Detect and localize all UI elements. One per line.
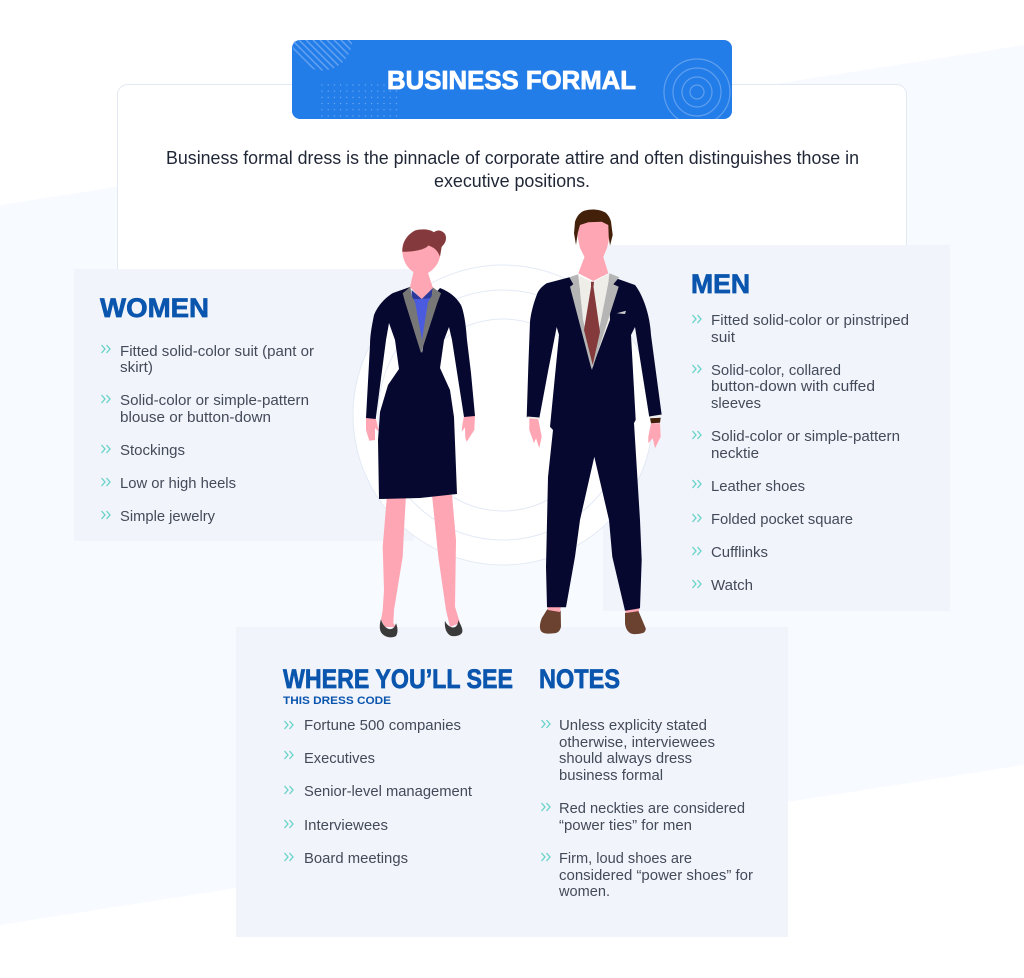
- banner rings: [664, 59, 730, 125]
- men items: Fitted solid-color or pinstriped: [711, 312, 909, 329]
- women items: Stockings: [120, 442, 185, 459]
- women heading: WOMEN: [100, 293, 209, 323]
- man tie: [584, 282, 600, 365]
- man head and neck: [577, 220, 610, 281]
- intro text: executive positions.: [434, 171, 590, 191]
- notes items: “power ties” for men: [559, 817, 692, 834]
- men items: Watch: [711, 577, 753, 594]
- notes items: business formal: [559, 767, 663, 784]
- man hair: [574, 209, 613, 246]
- where items: Fortune 500 companies: [304, 717, 461, 734]
- man watch: [650, 418, 661, 423]
- woman collar: [412, 288, 433, 299]
- where you'll see list: [283, 664, 513, 867]
- panel: intro card: [118, 84, 906, 384]
- woman blouse: [412, 297, 432, 342]
- women items: Low or high heels: [120, 475, 236, 492]
- where subheading: THIS DRESS CODE: [283, 695, 391, 707]
- notes items: Unless explicity stated: [559, 717, 707, 734]
- women items: skirt): [120, 359, 153, 376]
- women list: [100, 293, 314, 525]
- men items: suit: [711, 329, 736, 346]
- man cuffs: [527, 415, 662, 418]
- title: BUSINESS FORMAL: [387, 65, 636, 95]
- women items: Solid-color or simple-pattern: [120, 392, 309, 409]
- notes items: otherwise, interviewees: [559, 734, 715, 751]
- man shoes: [540, 609, 646, 634]
- men items: Folded pocket square: [711, 511, 853, 528]
- men items: sleeves: [711, 395, 761, 412]
- where items: Board meetings: [304, 850, 408, 867]
- woman head and neck: [402, 233, 441, 300]
- where items: Senior-level management: [304, 783, 473, 800]
- notes items: [542, 717, 753, 900]
- panel: women: [74, 269, 414, 541]
- man suit: [527, 277, 662, 611]
- where items: Interviewees: [304, 817, 388, 834]
- notes items: women.: [558, 883, 610, 900]
- men items: [692, 312, 909, 594]
- banner dots: [321, 84, 398, 119]
- intro text: [166, 148, 859, 191]
- women items: blouse or button-down: [120, 409, 271, 426]
- notes items: Firm, loud shoes are: [559, 850, 692, 867]
- title banner: [292, 40, 732, 119]
- banner stripes: [292, 40, 352, 70]
- men items: Leather shoes: [711, 478, 805, 495]
- women items: [102, 343, 314, 525]
- men items: necktie: [711, 445, 759, 462]
- men list: [691, 269, 909, 594]
- panel: men: [603, 245, 950, 611]
- man shirt: [579, 274, 610, 368]
- woman hair: [402, 229, 446, 257]
- men heading: MEN: [691, 269, 750, 299]
- woman jacket and skirt: [366, 287, 475, 499]
- notes heading: NOTES: [539, 664, 620, 694]
- figure: man: [527, 209, 662, 634]
- woman legs: [381, 495, 460, 627]
- men items: Solid-color, collared: [711, 362, 841, 379]
- panel: where and notes: [236, 627, 788, 937]
- where items: [284, 717, 473, 867]
- notes items: Red neckties are considered: [559, 800, 745, 817]
- notes items: should always dress: [559, 750, 692, 767]
- women items: Simple jewelry: [120, 508, 215, 525]
- man lapels: [569, 273, 619, 370]
- women items: Fitted solid-color suit (pant or: [120, 343, 314, 360]
- concentric rings behind figures: [353, 265, 653, 565]
- woman lapels: [403, 287, 441, 353]
- where heading: WHERE YOU’LL SEE: [283, 664, 513, 694]
- notes list: [539, 664, 753, 900]
- intro text: Business formal dress is the pinnacle of corporate attire and often distinguishes those in: [166, 148, 859, 168]
- men items: Solid-color or simple-pattern: [711, 428, 900, 445]
- men items: button-down with cuffed: [711, 378, 875, 395]
- woman hands: [366, 416, 475, 442]
- woman shoes: [380, 619, 462, 637]
- man pocket square: [617, 311, 626, 314]
- notes items: considered “power shoes” for: [559, 867, 753, 884]
- figure: woman: [366, 229, 475, 637]
- man ankles: [548, 606, 639, 613]
- where items: Executives: [304, 750, 375, 767]
- men items: Cufflinks: [711, 544, 768, 561]
- man hands: [529, 418, 661, 448]
